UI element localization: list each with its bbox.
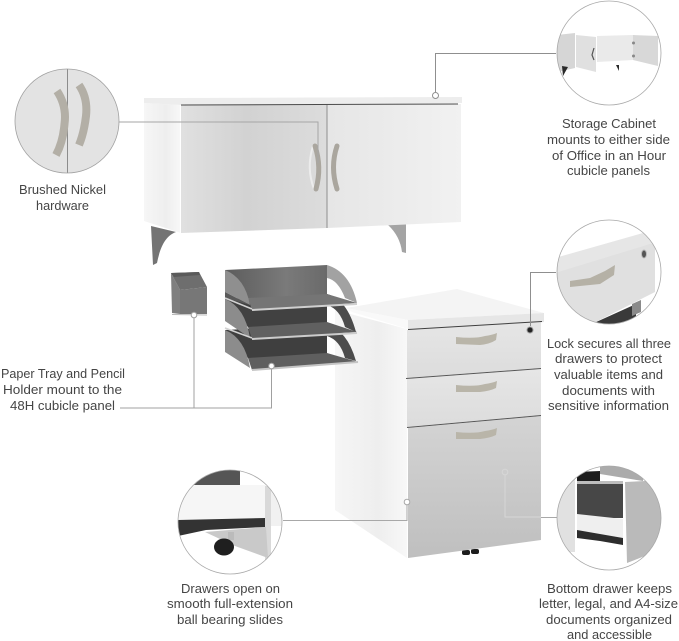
caption: lock: drawers to protect — [555, 352, 663, 366]
caption: drawer slides — [167, 582, 293, 627]
caption: storage cabinet: of Office in an Hour — [552, 149, 666, 163]
bottom drawer — [408, 416, 541, 558]
caption: lock: sensitive information — [548, 399, 669, 413]
leader line: lock — [530, 272, 556, 326]
leader line: bottom drawer — [502, 469, 557, 518]
caption: brushed nickel: hardware — [36, 199, 89, 213]
lock — [527, 327, 533, 333]
caption: lock: documents with — [562, 384, 655, 398]
pedestal casters — [462, 549, 479, 555]
tray level 1 — [225, 265, 357, 310]
caption: bottom drawer — [539, 582, 678, 641]
caption: bottom drawer: Bottom drawer keeps — [547, 582, 672, 596]
cabinet bracket right — [388, 224, 406, 253]
mobile file pedestal — [335, 289, 544, 558]
tray level 2 — [225, 294, 357, 339]
detail circle: drawer slide and caster — [178, 468, 283, 574]
pencil holder — [171, 272, 207, 315]
caption: bottom drawer: letter, legal, and A4-size — [539, 597, 678, 611]
caption: paper tray and pencil holder: Holder mount to the — [3, 383, 122, 397]
caption: brushed nickel — [19, 183, 106, 213]
pedestal top — [346, 289, 544, 320]
caption: storage cabinet: mounts to either side — [547, 133, 670, 147]
leader line: storage cabinet — [432, 54, 556, 98]
caption: bottom drawer: documents organized — [546, 613, 672, 627]
wall cabinet — [144, 97, 462, 265]
cabinet bracket left — [151, 226, 176, 265]
caption: storage cabinet: cubicle panels — [567, 164, 650, 178]
caption: lock — [547, 337, 671, 413]
caption: drawer slides: ball bearing slides — [177, 613, 283, 627]
paper tray — [225, 265, 358, 370]
detail circle: open cabinet — [557, 1, 661, 105]
caption: brushed nickel: Brushed Nickel — [19, 183, 106, 197]
tray level 3 — [225, 325, 358, 370]
leader line: paper tray and pencil holder — [120, 312, 274, 408]
caption: paper tray and pencil holder: 48H cubicle panel — [10, 399, 115, 413]
caption: lock: valuable items and — [554, 368, 663, 382]
leader line: drawer slides — [283, 499, 410, 520]
caption: storage cabinet — [547, 117, 670, 178]
detail circle: brushed nickel handles — [15, 69, 119, 173]
cabinet handles — [310, 146, 337, 189]
pedestal side — [335, 310, 407, 558]
cabinet top — [144, 97, 462, 105]
top drawer — [407, 322, 541, 378]
cabinet right door — [328, 104, 461, 228]
caption: lock: Lock secures all three — [547, 337, 671, 351]
caption: drawer slides: smooth full-extension — [167, 597, 293, 611]
drawer handles — [456, 333, 497, 439]
middle drawer — [407, 369, 541, 427]
caption: storage cabinet: Storage Cabinet — [562, 117, 657, 131]
caption: drawer slides: Drawers open on — [181, 582, 280, 596]
detail circle: lock and drawer — [555, 220, 661, 330]
detail circle: open file drawer — [557, 464, 665, 570]
leader line: brushed nickel — [119, 122, 318, 163]
cabinet left door — [181, 105, 326, 233]
caption: paper tray and pencil holder: Paper Tray and Pencil — [1, 367, 125, 381]
caption: paper tray and pencil holder — [1, 367, 125, 413]
cabinet side — [144, 103, 181, 233]
